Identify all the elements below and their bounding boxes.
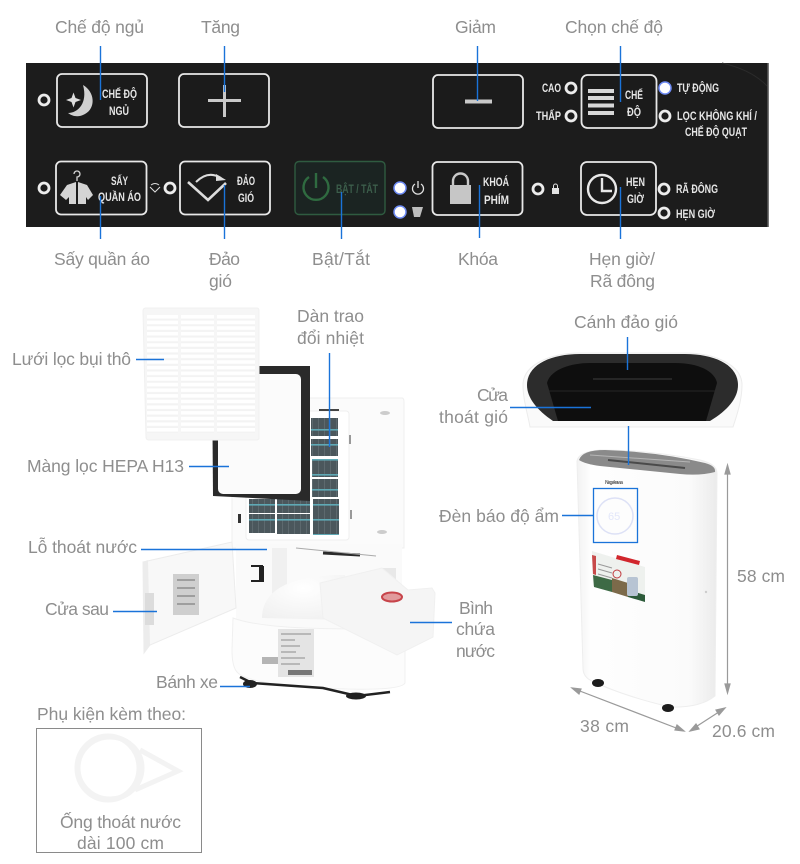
lock indicator: [533, 184, 559, 194]
label: heat exchanger: đổi nhiệt: [297, 328, 364, 348]
wheels: [592, 679, 674, 712]
label: HEPA filter: Màng lọc HEPA H13: [27, 456, 184, 476]
button: key lock: PHÍM: [484, 192, 509, 207]
label: rear door: [45, 599, 157, 619]
label: timer defrost: Hẹn giờ/: [589, 249, 655, 269]
label: water tank: chứa: [456, 619, 495, 639]
label: decrease: [455, 17, 496, 101]
button: swing: GIÓ: [238, 190, 254, 205]
button: timer: [581, 162, 656, 215]
label: choose mode: Chọn chế độ: [565, 17, 663, 37]
body: [577, 450, 717, 707]
humidity display: [597, 498, 633, 534]
dimension: depth: [690, 708, 775, 741]
brand: Nagakawa: [605, 480, 623, 486]
label: rear door: Cửa sau: [45, 599, 109, 619]
label: air outlet: thoát gió: [439, 407, 508, 427]
label: sleep mode: [55, 17, 144, 100]
control panel: [26, 63, 769, 227]
label: decrease: Giảm: [455, 17, 496, 37]
icon: swing small: [150, 184, 160, 192]
label: sleep mode: Chế độ ngủ: [55, 17, 144, 37]
upper body: [232, 398, 404, 548]
button: swing: ĐẢO: [237, 173, 255, 188]
water tank: [320, 568, 435, 655]
label: lock: Khóa: [458, 249, 498, 269]
label: humidity light: [439, 488, 638, 542]
mode indicators: THẤP: [536, 108, 561, 123]
label: clothes drying: Sấy quần áo: [54, 249, 150, 269]
mode indicators: [536, 80, 758, 139]
button: mode: ĐỘ: [627, 104, 641, 119]
label: heat exchanger: Dàn trao: [297, 306, 364, 326]
button: plus: [179, 74, 269, 127]
label: humidity light: Đèn báo độ ẩm: [439, 506, 559, 526]
dimension: width: [572, 688, 684, 736]
coarse dust filter: [143, 308, 259, 440]
grey top: [579, 450, 715, 475]
label: increase: Tăng: [201, 17, 240, 37]
label: clothes drying: [54, 196, 150, 269]
rear door: [143, 542, 236, 653]
timer indicators: RÃ ĐÔNG: [676, 181, 718, 196]
button: sleep mode: [57, 74, 147, 127]
button: mode: [582, 75, 656, 128]
button: minus: [433, 75, 523, 128]
label: increase: [201, 17, 240, 92]
button: timer: HẸN: [626, 175, 645, 189]
humidity display: 65: [608, 511, 620, 523]
button: timer: GIỜ: [627, 191, 645, 206]
label: swing blade: [574, 312, 678, 370]
label: water tank: Bình: [459, 598, 493, 618]
label: timer defrost: [589, 187, 655, 291]
label: power: Bật/Tắt: [312, 248, 370, 269]
label: wheels: [156, 672, 250, 692]
label: timer defrost: Rã đông: [590, 271, 655, 291]
accessories box: [36, 728, 202, 853]
dimension: height: [725, 465, 785, 693]
mode indicators: CAO: [542, 81, 561, 95]
dimension: width: 38 cm: [580, 716, 629, 736]
mode indicators: CHẾ ĐỘ QUẠT: [685, 124, 747, 139]
label: heat exchanger: [297, 306, 364, 447]
label: lock: [458, 185, 498, 269]
hose caption: [60, 811, 181, 853]
indicator: swing: [165, 183, 175, 193]
hose caption: Ống thoát nước: [60, 811, 181, 832]
button: power: BẬT / TẮT: [336, 181, 378, 196]
button: sleep mode: NGỦ: [109, 103, 129, 118]
button: swing: [180, 162, 270, 214]
timer indicators: HẸN GIỜ: [676, 206, 716, 221]
label: wheels: Bánh xe: [156, 672, 218, 692]
button: sleep mode: CHẾ ĐỘ: [102, 86, 137, 101]
accessories heading: Phụ kiện kèm theo:: [37, 704, 186, 724]
label: drain hole: Lỗ thoát nước: [28, 536, 137, 557]
label: air outlet: Cửa: [477, 385, 508, 405]
label: air swing: Đảo: [209, 249, 240, 269]
indicator: drying: [39, 183, 49, 193]
label: coarse filter: Lưới lọc bụi thô: [12, 349, 131, 369]
dimension: depth: 20.6 cm: [712, 721, 775, 741]
button: clothes drying: QUẦN ÁO: [98, 189, 141, 204]
icon: drain hose: [77, 736, 178, 800]
label: water tank: [410, 598, 495, 661]
button: clothes drying: [56, 162, 146, 214]
button: power: [295, 162, 385, 214]
button: mode: CHẾ: [625, 87, 643, 102]
button: key lock: KHOÁ: [483, 174, 509, 189]
top view of air outlet: [523, 353, 742, 427]
label: choose mode: [565, 17, 663, 102]
label: air swing: gió: [209, 271, 232, 291]
indicator: sleep: [39, 95, 49, 105]
mode indicators: TỰ ĐỘNG: [677, 80, 719, 95]
HEPA filter: [212, 366, 310, 501]
side port: [705, 591, 707, 593]
lower compartment: [236, 544, 402, 629]
label: power: [312, 192, 370, 269]
label: air outlet: [439, 385, 591, 427]
timer indicators: [659, 181, 718, 221]
status lights: [394, 181, 424, 218]
button: clothes drying: SẤY: [111, 173, 128, 188]
exploded rear view of dehumidifier: [143, 308, 435, 700]
connector from top view: [628, 426, 630, 465]
heat exchanger coil: [249, 418, 339, 535]
button: key lock: [432, 162, 522, 215]
label: water tank: nước: [456, 641, 495, 661]
mode indicators: LỌC KHÔNG KHÍ /: [677, 108, 758, 123]
label: air swing: [209, 185, 240, 291]
front view of dehumidifier: [577, 450, 717, 712]
hose caption: dài 100 cm: [77, 833, 164, 853]
product sticker: [592, 551, 645, 602]
base: [232, 618, 405, 700]
label: swing blade: Cánh đảo gió: [574, 312, 678, 332]
dimension: height: 58 cm: [737, 566, 785, 586]
